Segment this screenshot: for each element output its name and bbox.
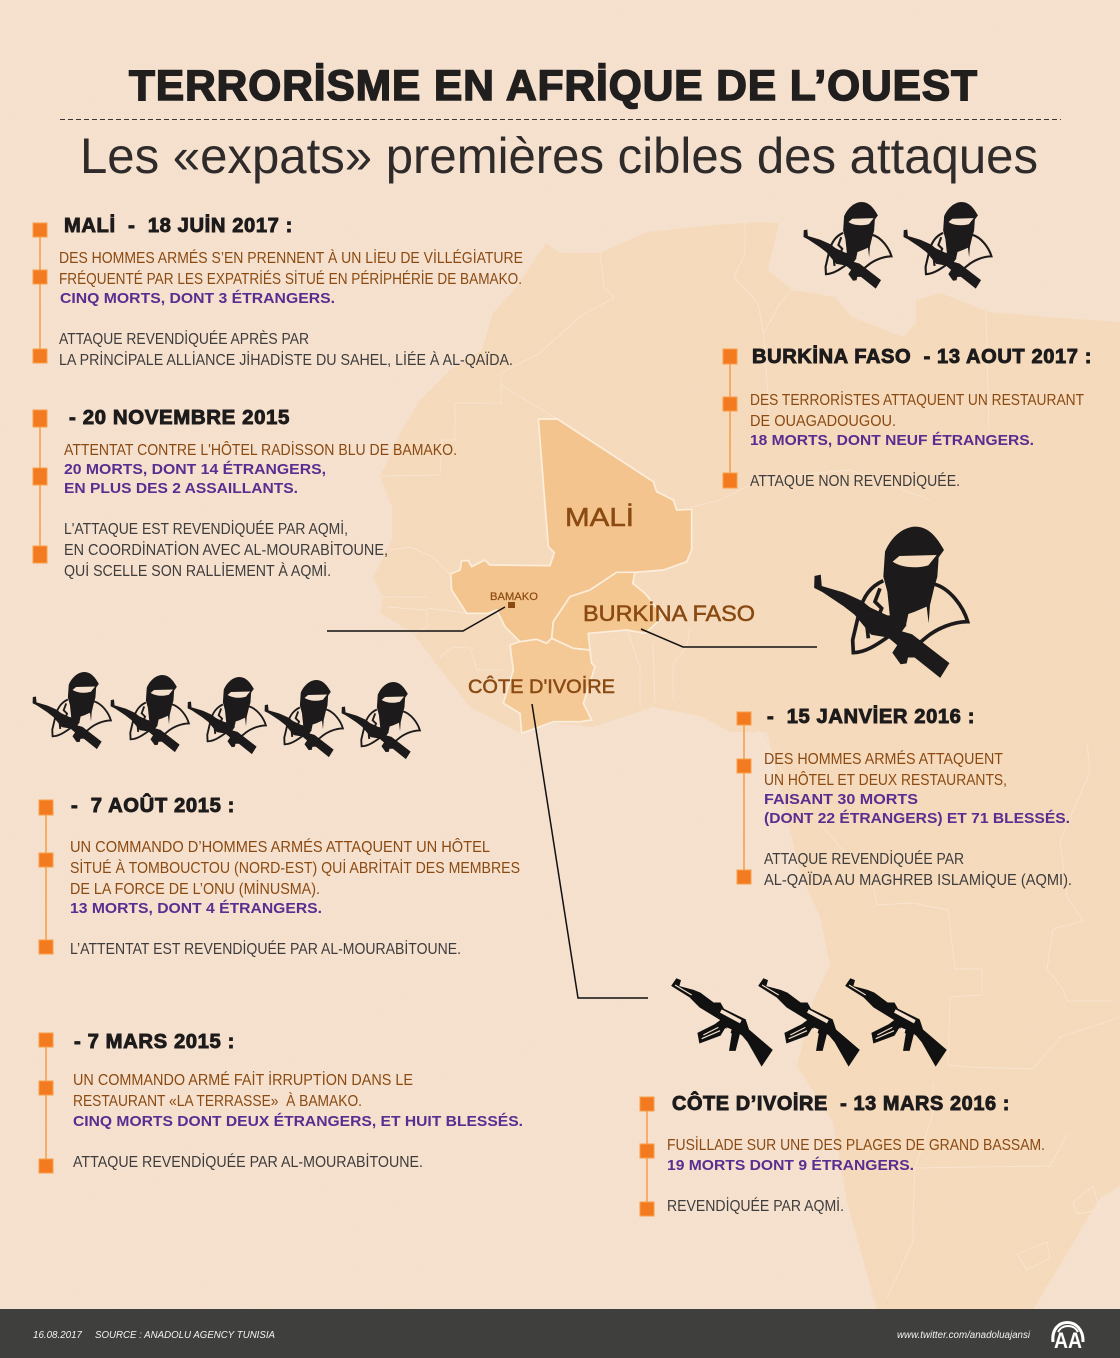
- text block: RESTAURANT «LA TERRASSE» À BAMAKO.: [73, 1091, 362, 1110]
- text block: LA PRİNCİPALE ALLİANCE JİHADİSTE DU SAHEL, LİÉE À AL-QAÏDA.: [59, 350, 513, 369]
- text block: ATTENTAT CONTRE L'HÔTEL RADİSSON BLU DE BAMAKO.: [64, 440, 457, 459]
- panel: Mali 7 aout 2015: [39, 793, 520, 958]
- panel: Mali 7 mars 2015: [39, 1031, 523, 1173]
- text block: 19 MORTS DONT 9 ÉTRANGERS.: [667, 1157, 914, 1174]
- text block: DES HOMMES ARMÉS S’EN PRENNENT À UN LİEU DE VİLLÉGİATURE: [59, 248, 523, 267]
- label: Cote d'Ivoire: CÔTE D'IVOİRE: [468, 676, 615, 698]
- icon: large gunman: [815, 527, 968, 677]
- text block: FUSİLLADE SUR UNE DES PLAGES DE GRAND BASSAM.: [667, 1135, 1045, 1154]
- text block: 13 MORTS, DONT 4 ÉTRANGERS.: [70, 900, 322, 917]
- text block: QUİ SCELLE SON RALLİEMENT À AQMİ.: [64, 561, 331, 580]
- panel: Burkina Faso 15 janvier 2016: [737, 705, 1072, 889]
- source line: SOURCE : ANADOLU AGENCY TUNISIA: [95, 1330, 275, 1341]
- heading: - 7 MARS 2015 :: [74, 1031, 235, 1053]
- map: Burkina Faso: [552, 572, 663, 650]
- text block: [73, 1070, 523, 1171]
- footer: [0, 1309, 1120, 1358]
- text block: [59, 248, 523, 369]
- map of Africa: [373, 222, 1120, 1310]
- text block: [764, 749, 1072, 889]
- text block: REVENDİQUÉE PAR AQMİ.: [667, 1196, 844, 1215]
- text block: EN PLUS DES 2 ASSAILLANTS.: [64, 480, 298, 497]
- text block: SİTUÉ À TOMBOUCTOU (NORD-EST) QUİ ABRİTAİT DES MEMBRES: [70, 858, 520, 877]
- text block: [70, 837, 520, 958]
- panel: Burkina Faso 13 aout 2017: [723, 345, 1092, 490]
- text block: [667, 1135, 1045, 1215]
- text block: UN HÔTEL ET DEUX RESTAURANTS,: [764, 770, 1007, 789]
- connector: Burkina Faso: [641, 629, 817, 647]
- label: Bamako: [490, 591, 538, 608]
- label: Burkina Faso: BURKİNA FASO: [583, 601, 755, 626]
- map: Mali: [451, 419, 692, 643]
- label: Mali: MALİ: [565, 502, 634, 532]
- connector: Bamako: [327, 607, 505, 631]
- text block: DE OUAGADOUGOU.: [750, 413, 896, 430]
- label: Bamako: BAMAKO: [490, 591, 538, 603]
- text block: DES HOMMES ARMÉS ATTAQUENT: [764, 749, 1003, 768]
- text block: ATTAQUE REVENDİQUÉE PAR: [764, 849, 964, 868]
- text block: AL-QAÏDA AU MAGHREB ISLAMİQUE (AQMI).: [764, 870, 1072, 889]
- heading: CÔTE D’IVOİRE - 13 MARS 2016 :: [672, 1091, 1010, 1115]
- icons: five gunmen row: [33, 672, 420, 758]
- text block: ATTAQUE REVENDİQUÉE PAR AL-MOURABİTOUNE.: [73, 1152, 423, 1171]
- text block: FRÉQUENTÉ PAR LES EXPATRİÉS SİTUÉ EN PÉRİPHÉRİE DE BAMAKO.: [59, 269, 522, 288]
- panel: Cote d'Ivoire 13 mars 2016: [640, 1091, 1045, 1216]
- text block: EN COORDİNATİON AVEC AL-MOURABİTOUNE,: [64, 540, 388, 559]
- logo: AA: AA: [1054, 1328, 1082, 1353]
- text block: DE LA FORCE DE L’ONU (MİNUSMA).: [70, 879, 320, 898]
- source line: 16.08.2017: [33, 1330, 82, 1341]
- panel: Mali 18 juin 2017: [33, 214, 523, 369]
- heading: - 15 JANVİER 2016 :: [767, 705, 975, 728]
- map: Cote d'Ivoire: [503, 638, 595, 733]
- text block: UN COMMANDO D’HOMMES ARMÉS ATTAQUENT UN HÔTEL: [70, 837, 490, 856]
- text block: [750, 390, 1084, 490]
- heading: BURKİNA FASO - 13 AOUT 2017 :: [752, 345, 1092, 368]
- text block: ATTAQUE REVENDİQUÉE APRÈS PAR: [59, 329, 309, 348]
- text block: ATTAQUE NON REVENDİQUÉE.: [750, 471, 960, 490]
- heading: MALİ - 18 JUİN 2017 :: [64, 214, 293, 237]
- text block: FAISANT 30 MORTS: [764, 791, 918, 808]
- connector: Cote d'Ivoire: [532, 704, 648, 998]
- text block: L'ATTAQUE EST REVENDİQUÉE PAR AQMİ,: [64, 519, 348, 538]
- text block: CINQ MORTS DONT DEUX ÉTRANGERS, ET HUIT BLESSÉS.: [73, 1113, 523, 1130]
- text block: [64, 440, 457, 580]
- twitter link: www.twitter.com/anadoluajansi: [897, 1330, 1031, 1341]
- text block: L’ATTENTAT EST REVENDİQUÉE PAR AL-MOURABİTOUNE.: [70, 939, 461, 958]
- icons: two gunmen, Burkina Faso 2017: [804, 202, 991, 288]
- subtitle: Les «expats» premières cibles des attaques: [80, 128, 1038, 184]
- text block: UN COMMANDO ARMÉ FAİT İRRUPTİON DANS LE: [73, 1070, 413, 1089]
- text block: 20 MORTS, DONT 14 ÉTRANGERS,: [64, 461, 326, 478]
- text block: 18 MORTS, DONT NEUF ÉTRANGERS.: [750, 432, 1034, 449]
- text block: CINQ MORTS, DONT 3 ÉTRANGERS.: [60, 290, 335, 307]
- icons: three rifles: [672, 979, 946, 1065]
- panel: Mali 20 novembre 2015: [33, 407, 457, 580]
- heading: - 20 NOVEMBRE 2015: [69, 407, 290, 429]
- text block: (DONT 22 ÉTRANGERS) ET 71 BLESSÉS.: [764, 810, 1070, 827]
- title: TERRORİSME EN AFRİQUE DE L’OUEST: [129, 62, 978, 110]
- heading: - 7 AOÛT 2015 :: [71, 793, 235, 817]
